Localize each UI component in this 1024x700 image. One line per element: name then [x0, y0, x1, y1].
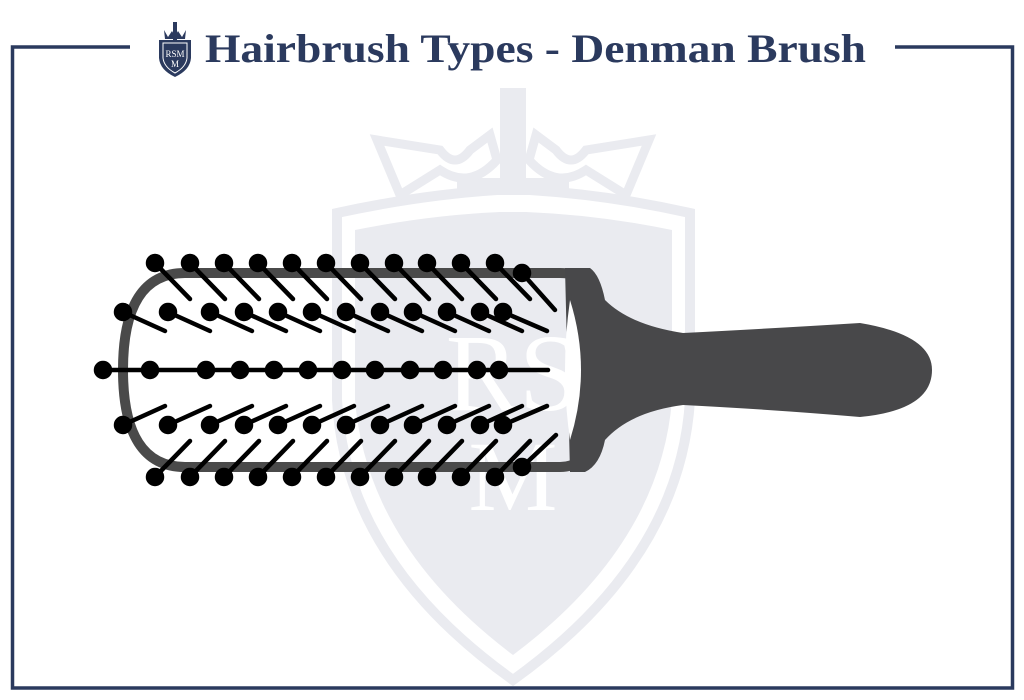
watermark shield: [337, 88, 690, 680]
logo icon: [159, 22, 191, 77]
brush head outline: [123, 273, 597, 467]
brush: [96, 256, 932, 484]
logo icon: M: [171, 59, 179, 69]
handle: [565, 268, 932, 472]
bristles: [96, 256, 556, 484]
handle lens window: [565, 300, 581, 440]
title: Hairbrush Types - Denman Brush: [205, 26, 866, 71]
logo icon: RSM: [165, 49, 185, 59]
watermark shield: M: [469, 421, 557, 532]
watermark shield: RS: [446, 312, 580, 434]
